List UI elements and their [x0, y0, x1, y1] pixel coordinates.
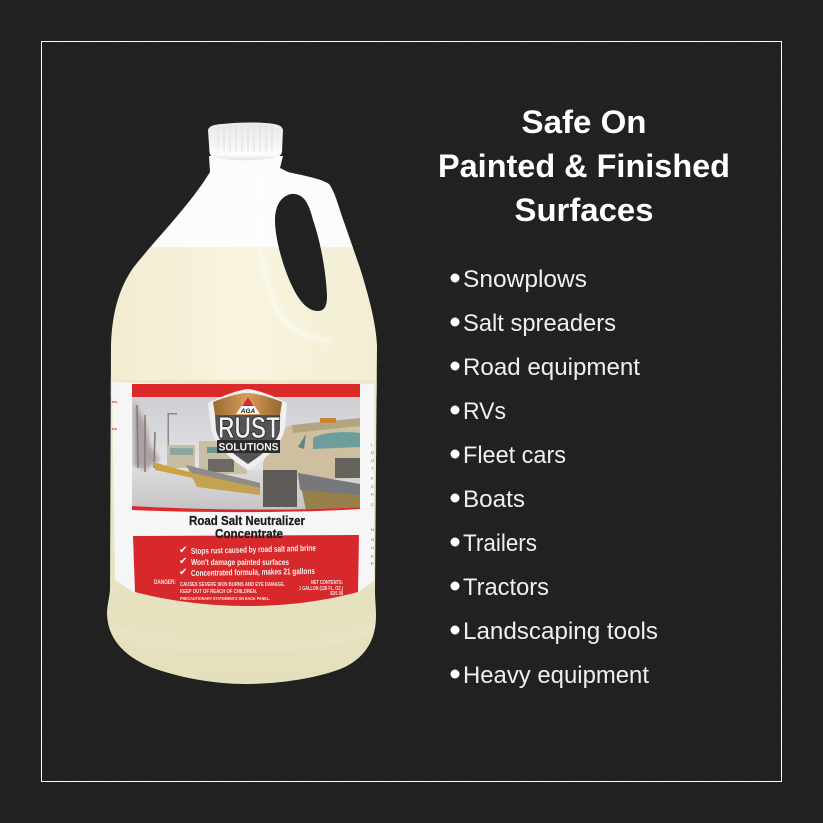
side panel fine print: O	[371, 458, 374, 463]
product name	[189, 513, 305, 541]
product name: Road Salt Neutralizer	[189, 513, 305, 528]
left truck	[167, 445, 195, 468]
side panel fine print: T	[371, 466, 374, 471]
side panel fine print: D	[371, 450, 374, 455]
logo: AGA Rust Solutions shield: AGA	[240, 408, 256, 415]
logo: AGA Rust Solutions shield: RUST	[218, 410, 280, 445]
side panel fine print: C	[371, 502, 374, 507]
item: Landscaping tools: Landscaping tools	[463, 618, 658, 645]
danger warning: DANGER:	[154, 580, 176, 586]
item: Salt spreaders: Salt spreaders	[463, 310, 616, 337]
side panel fine print: F	[371, 476, 374, 481]
danger warning: PRECAUTIONARY STATEMENTS ON BACK PANEL.	[180, 596, 270, 601]
danger warning: KEEP OUT OF REACH OF CHILDREN.	[180, 589, 258, 595]
item: Fleet cars: Fleet cars	[463, 442, 566, 469]
logo: AGA Rust Solutions shield	[208, 389, 287, 470]
side panel fine print: P	[371, 554, 374, 559]
benefits list: Won't damage painted surfaces	[191, 557, 289, 567]
benefits list: Stops rust caused by road salt and brine	[191, 543, 316, 556]
benefits list: ✔	[179, 567, 187, 578]
danger warning: CAUSES SEVERE SKIN BURNS AND EYE DAMAGE.	[180, 582, 286, 588]
side panel fine print: P	[371, 561, 374, 566]
heading: Safe On	[522, 104, 646, 140]
benefits list: ✔	[179, 556, 187, 567]
net contents	[299, 580, 343, 597]
side panel fine print: C	[371, 484, 374, 489]
side panel fine print: U	[371, 545, 374, 550]
heading: Painted & Finished	[438, 148, 730, 184]
item: Road equipment: Road equipment	[463, 354, 640, 381]
net contents: 1 GALLON (128 FL. OZ.)	[299, 586, 343, 592]
side panel fine print: I	[371, 442, 372, 447]
lower red stripe	[132, 506, 360, 512]
item: RVs: RVs	[463, 398, 506, 425]
small side text: ns	[112, 426, 117, 431]
middle truck	[199, 441, 247, 474]
net contents: NET CONTENTS:	[311, 580, 343, 586]
product label	[112, 382, 374, 606]
benefits list: ✔	[179, 545, 187, 556]
small side text	[112, 399, 118, 431]
side panel fine print: N	[371, 527, 374, 532]
bottle cap	[208, 122, 283, 160]
benefits list: Concentrated formula, makes 21 gallons	[191, 566, 315, 578]
danger warning	[154, 580, 286, 601]
heading	[438, 104, 730, 228]
item: Trailers: Trailers	[463, 530, 537, 557]
benefits list	[179, 543, 316, 578]
top red band	[132, 384, 360, 398]
side panel fine print: O	[371, 537, 374, 542]
label paper	[112, 382, 374, 593]
item: Snowplows: Snowplows	[463, 266, 587, 293]
product name: Concentrate	[215, 526, 283, 541]
heading: Surfaces	[514, 192, 654, 228]
red benefits panel	[133, 535, 359, 606]
small side text: ns,	[112, 399, 118, 404]
right truck	[263, 425, 360, 480]
surfaces list	[450, 266, 658, 689]
item: Boats: Boats	[463, 486, 525, 513]
item: Heavy equipment: Heavy equipment	[463, 662, 649, 689]
side panel fine print	[371, 442, 374, 566]
photo of snowplows	[132, 397, 360, 512]
side panel fine print: P	[371, 492, 374, 497]
item: Tractors: Tractors	[463, 574, 549, 601]
net contents: SDS 08	[330, 591, 343, 597]
logo: AGA Rust Solutions shield: SOLUTIONS	[218, 442, 278, 454]
bottle body	[100, 150, 390, 690]
product bottle	[100, 122, 390, 690]
